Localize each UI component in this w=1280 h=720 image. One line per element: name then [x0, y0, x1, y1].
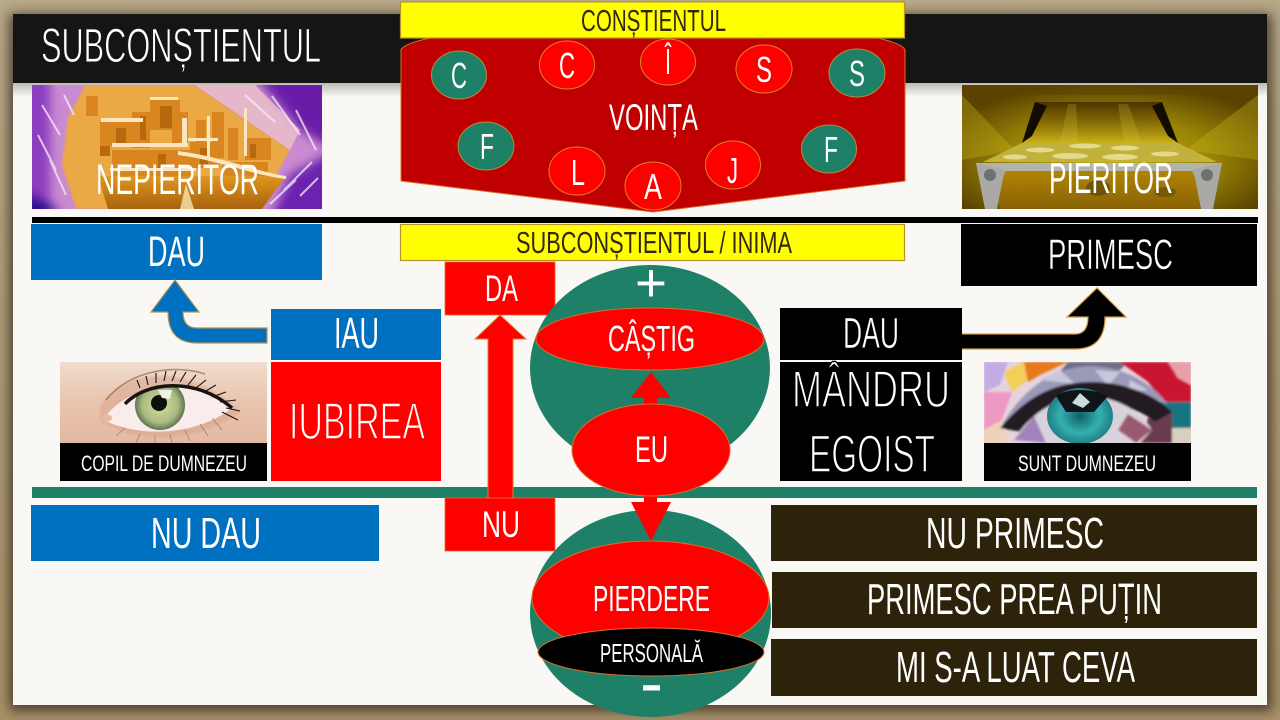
- box: NU: NU: [482, 504, 520, 545]
- letter F left: [458, 122, 514, 170]
- box: NU PRIMESC: NU PRIMESC: [926, 509, 1104, 558]
- letter C red: [540, 41, 594, 89]
- label: PIERITOR: [1049, 154, 1173, 203]
- box: IAU: IAU: [334, 309, 379, 358]
- letter L: L: [571, 152, 585, 193]
- box: DA: DA: [485, 268, 518, 309]
- ellipse: PERSONALĂ: [538, 628, 764, 676]
- letter S green: S: [849, 53, 865, 94]
- box: MI S-A LUAT CEVA: MI S-A LUAT CEVA: [896, 643, 1135, 692]
- box: DAU blue: [31, 224, 322, 280]
- heading: SUBCONȘTIENTUL: [41, 20, 321, 73]
- box: NU: [445, 498, 555, 551]
- heading: CONȘTIENTUL: [400, 2, 904, 38]
- arrow: EU to PIERDERE: [631, 490, 671, 541]
- ellipse: PERSONALĂ: PERSONALĂ: [600, 638, 703, 668]
- letter S green: [829, 49, 885, 97]
- letter S red: S: [756, 49, 772, 90]
- label: NEPIERITOR: [96, 156, 259, 204]
- box: DAU black: [780, 308, 962, 360]
- box: MI S-A LUAT CEVA: [771, 639, 1257, 696]
- box: PRIMESC: [961, 224, 1257, 286]
- diagram: loss sphere: [530, 510, 771, 720]
- image: green eye with caption: COPIL DE DUMNEZEU: [81, 451, 247, 476]
- ellipse: PIERDERE: [532, 541, 769, 655]
- box: MÂNDRU EGOIST: EGOIST: [809, 425, 935, 484]
- letter C green: C: [451, 55, 467, 96]
- panel: VOINȚA: [400, 2, 905, 212]
- letter S red: [736, 45, 792, 93]
- green divider: [32, 487, 1257, 498]
- image: green eye with caption: [60, 362, 267, 481]
- caption: [984, 443, 1191, 481]
- label: VOINȚA: VOINȚA: [609, 97, 698, 138]
- box: NU DAU: [31, 505, 379, 561]
- image: colourful eye with caption: SUNT DUMNEZEU: [1018, 451, 1156, 476]
- ellipse: CÂȘTIG: CÂȘTIG: [608, 318, 695, 359]
- image: colourful eye with caption: [984, 362, 1191, 481]
- arrow: NU to DA: [475, 315, 526, 498]
- box: PRIMESC: PRIMESC: [1048, 231, 1173, 279]
- box: PRIMESC PREA PUȚIN: [772, 572, 1257, 628]
- header bar: SUBCONȘTIENTUL: [13, 14, 1267, 83]
- letter Î: [640, 39, 696, 85]
- letter A: A: [644, 166, 662, 207]
- minus sign: -: [640, 645, 663, 720]
- letter J: [706, 141, 760, 191]
- box: IAU: [271, 309, 441, 360]
- ellipse: CÂȘTIG: [536, 308, 764, 370]
- header shadow: [13, 83, 1267, 97]
- heading: CONȘTIENTUL: CONȘTIENTUL: [581, 3, 726, 38]
- box: DAU black: DAU: [843, 309, 899, 358]
- letter A: [625, 162, 681, 210]
- panel: image NEPIERITOR: [32, 85, 322, 209]
- ellipse: PIERDERE: PIERDERE: [593, 578, 710, 619]
- divider line: [32, 217, 1258, 223]
- ellipse: EU: EU: [635, 429, 668, 470]
- box: DAU blue: DAU: [148, 228, 205, 276]
- plus sign: +: [635, 253, 667, 313]
- letter F right: F: [824, 129, 838, 170]
- panel: image PIERITOR: [962, 85, 1258, 209]
- heading: SUBCONȘTIENTUL / INIMA: SUBCONȘTIENTUL / INIMA: [516, 225, 792, 260]
- box: IUBIREA: [271, 362, 441, 481]
- box: MÂNDRU EGOIST: [780, 361, 962, 484]
- letter Î: Î: [664, 41, 672, 82]
- letter L: [549, 147, 605, 195]
- box: MÂNDRU EGOIST: MÂNDRU: [792, 361, 950, 419]
- arrow: DAU to PRIMESC: [950, 288, 1126, 349]
- diagram: gain sphere: [530, 253, 770, 471]
- letter F right: [802, 125, 856, 173]
- box: NU PRIMESC: [771, 505, 1257, 561]
- box: NU DAU: NU DAU: [151, 509, 261, 558]
- arrow: EU to CÂȘTIG: [631, 372, 671, 410]
- box: IUBIREA: IUBIREA: [289, 393, 425, 451]
- arrow: IAU to DAU: [151, 280, 267, 343]
- letter F left: F: [480, 126, 494, 167]
- letter C green: [432, 51, 486, 99]
- letter J: J: [727, 150, 738, 191]
- box: DA: [445, 262, 555, 315]
- ellipse: EU: [572, 404, 730, 496]
- letter C red: C: [559, 45, 575, 86]
- caption: [60, 443, 267, 481]
